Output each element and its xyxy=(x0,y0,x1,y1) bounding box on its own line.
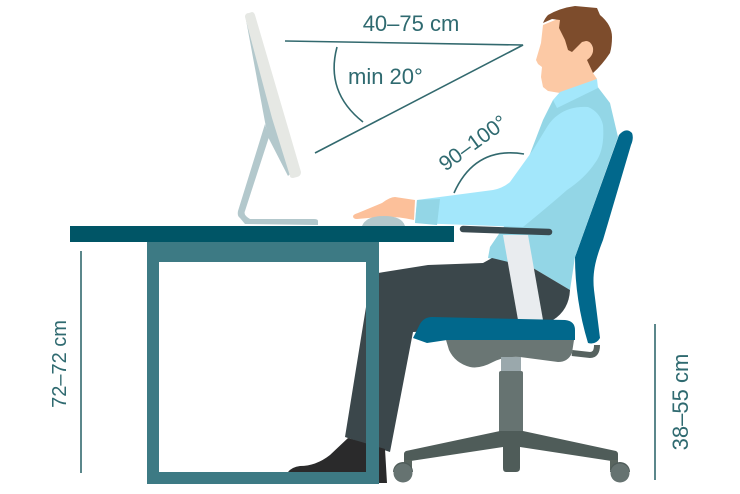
hair xyxy=(543,6,612,73)
label: seat height: 38–55 cm xyxy=(668,354,693,450)
viewing distance lines xyxy=(285,41,523,153)
hand xyxy=(353,197,415,220)
chair casters xyxy=(393,460,630,482)
chair seat xyxy=(413,317,575,343)
desk height line xyxy=(80,251,82,473)
label: viewing distance: 40–75 cm xyxy=(363,11,459,36)
figure: seated person xyxy=(288,6,618,483)
elbow angle arc xyxy=(454,153,524,193)
desk frame xyxy=(147,240,379,484)
chair bracket xyxy=(572,345,597,355)
computer mouse xyxy=(362,216,405,226)
desk xyxy=(70,226,454,484)
icon: computer monitor xyxy=(238,12,318,225)
chair column xyxy=(499,357,523,433)
neck and face xyxy=(536,18,597,93)
label: desk height: 72–72 cm xyxy=(49,320,71,408)
label: viewing angle: min 20° xyxy=(348,64,423,89)
chair backrest xyxy=(575,130,633,343)
shirt collar xyxy=(553,79,598,108)
shirt body xyxy=(488,86,618,290)
shirt cuff xyxy=(415,199,440,225)
shirt sleeve xyxy=(415,107,603,227)
armrest support xyxy=(503,235,543,320)
seat height line xyxy=(654,324,656,480)
armrest xyxy=(463,229,549,232)
desk top xyxy=(70,226,454,242)
chair star base xyxy=(404,431,618,472)
chair seat base xyxy=(446,340,574,367)
shoe xyxy=(288,438,387,483)
trousers xyxy=(345,258,570,452)
label: elbow angle: 90–100° xyxy=(435,111,512,176)
